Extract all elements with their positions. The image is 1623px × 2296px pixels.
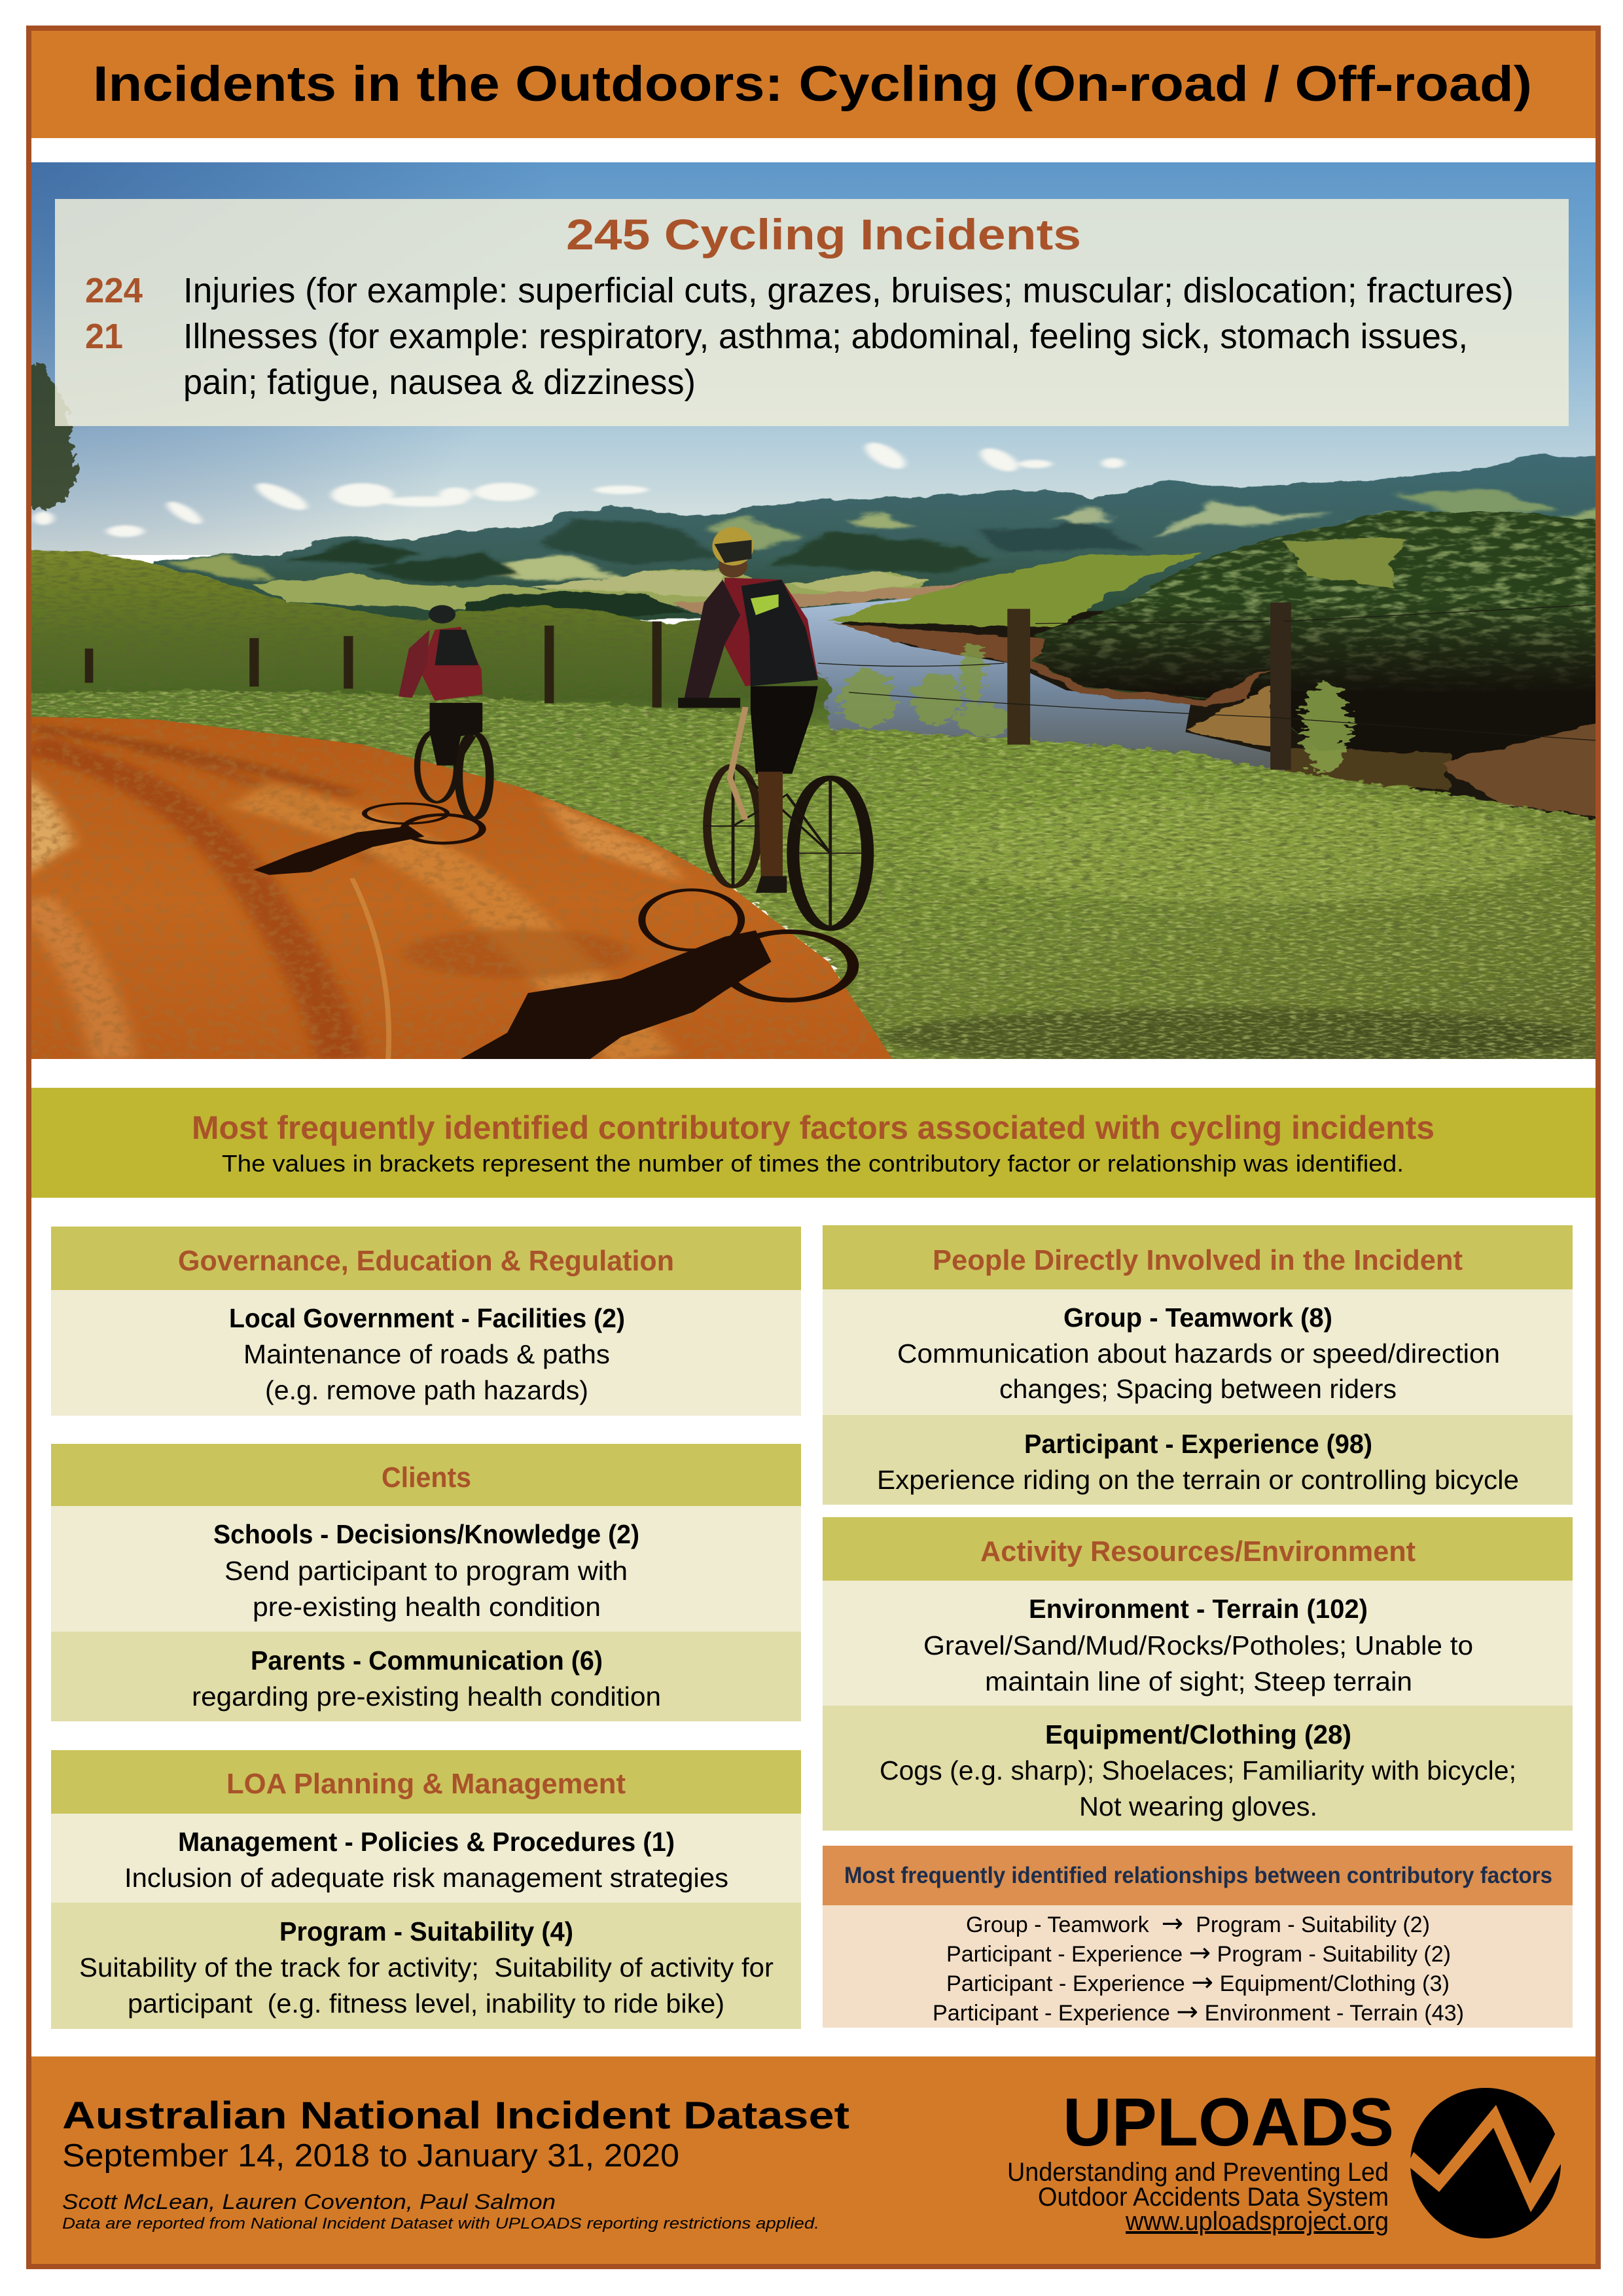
- authors: Scott McLean, Lauren Coventon, Paul Salmon: [62, 2190, 556, 2214]
- factor: local government: [229, 1303, 625, 1405]
- date range: September 14, 2018 to January 31, 2020: [62, 2138, 679, 2174]
- factor: program: participant (e.g. fitness level, inability to ride bike): [128, 1988, 724, 2018]
- heading: Most frequently identified relationships between contributory factors: [844, 1863, 1552, 1888]
- factor: participant: Participant - Experience (98): [1024, 1429, 1372, 1459]
- panel: governance, education and regulation: [51, 1227, 801, 1416]
- stat: illnesses: 21: [85, 317, 123, 356]
- UPLOADS description: www.uploadsproject.org: [1125, 2207, 1389, 2236]
- green hill above river: [829, 552, 1201, 628]
- distant mountains: [155, 454, 1623, 619]
- stat: illnesses: [85, 317, 1468, 402]
- title: Incidents in the Outdoors: Cycling (On-road / Off-road): [93, 56, 1532, 112]
- heading: Governance, Education & Regulation: [178, 1245, 674, 1277]
- factor: group: Communication about hazards or speed/direction: [897, 1338, 1500, 1369]
- title banner: [31, 31, 1596, 138]
- UPLOADS description: Understanding and Preventing Led: [1007, 2158, 1389, 2187]
- factor: schools: Send participant to program with: [224, 1556, 628, 1586]
- panel: activity resources and environment: [823, 1517, 1573, 1831]
- banner note: The values in brackets represent the number of times the contributory factor or relationship was identified.: [222, 1150, 1404, 1177]
- factor: group: [897, 1302, 1500, 1404]
- foreground grass verge: [0, 686, 1623, 1087]
- dark underlay behind the river and forest: [840, 611, 1596, 821]
- factor: equipment: Cogs (e.g. sharp); Shoelaces; Familiarity with bicycle;: [880, 1755, 1516, 1785]
- factor: group: changes; Spacing between riders: [999, 1374, 1397, 1404]
- factor: management: Inclusion of adequate risk management strategies: [124, 1863, 728, 1893]
- shrubs along the fence: [841, 645, 1348, 774]
- relationship list: Participant - Experience → Program - Suitability (2): [946, 1938, 1451, 1968]
- panel: clients: [51, 1444, 801, 1721]
- panel: people directly involved: [823, 1225, 1573, 1505]
- factor: management: [124, 1827, 728, 1893]
- factor: program: Suitability of the track for activity; Suitability of activity for: [79, 1952, 774, 1982]
- section banner: contributory factors: [31, 1088, 1596, 1198]
- stat: illnesses: pain; fatigue, nausea & dizziness): [183, 363, 696, 402]
- stat: injuries: 224: [85, 271, 143, 310]
- UPLOADS description: Outdoor Accidents Data System: [1038, 2183, 1389, 2212]
- banner heading: Most frequently identified contributory factors associated with cycling incidents: [192, 1109, 1435, 1146]
- heading: LOA Planning & Management: [226, 1768, 626, 1800]
- factor: equipment: [880, 1719, 1516, 1821]
- factor: local government: Local Government - Facilities (2): [229, 1303, 625, 1333]
- relationship list: Participant - Experience → Environment - Terrain (43): [933, 1997, 1464, 2027]
- factor: participant: [877, 1429, 1519, 1495]
- factor: parents: regarding pre-existing health condition: [192, 1681, 661, 1712]
- panel: LOA planning and management: [51, 1750, 801, 2029]
- fence posts and wires: [85, 603, 1596, 770]
- photo: two cyclists on a dirt road above a lake: [0, 162, 1623, 1087]
- cast shadows of the cyclists: [254, 804, 853, 1059]
- tree at left edge: [31, 362, 80, 511]
- relationship list: Group - Teamwork → Program - Suitability (2): [966, 1909, 1430, 1939]
- left hillside: [0, 544, 838, 736]
- relationship list: [933, 1909, 1464, 2027]
- factor: schools: pre-existing health condition: [253, 1592, 601, 1622]
- river: [687, 598, 1285, 771]
- panel: relationships between contributory factors: [823, 1846, 1573, 2028]
- factor: group: Group - Teamwork (8): [1063, 1302, 1332, 1333]
- stat: illnesses: Illnesses (for example: respiratory, asthma; abdominal, feeling sick, stomach issues,: [183, 317, 1468, 356]
- far cyclist: [399, 605, 490, 819]
- UPLOADS description: [1007, 2158, 1389, 2236]
- clouds: [33, 440, 1124, 537]
- factor: schools: [213, 1519, 639, 1622]
- factor: environment: Environment - Terrain (102): [1029, 1594, 1368, 1624]
- factor: schools: Schools - Decisions/Knowledge (2): [213, 1519, 639, 1549]
- heading: Clients: [382, 1462, 471, 1494]
- sky: [31, 162, 1596, 555]
- factor: parents: [192, 1645, 661, 1712]
- factor: management: Management - Policies & Procedures (1): [178, 1827, 675, 1857]
- dirt road: [0, 711, 932, 1087]
- factor: environment: maintain line of sight; Steep terrain: [985, 1666, 1412, 1696]
- panel: incident totals: [55, 199, 1569, 426]
- stat: injuries: Injuries (for example: superficial cuts, grazes, bruises; muscular; dislocation; fractures): [183, 271, 1514, 310]
- river banks: [834, 622, 1623, 826]
- factor: program: [79, 1916, 774, 2018]
- factor: local government: (e.g. remove path hazards): [265, 1375, 588, 1405]
- factor: local government: Maintenance of roads & paths: [243, 1339, 610, 1369]
- heading: Activity Resources/Environment: [980, 1535, 1416, 1568]
- factor: environment: Gravel/Sand/Mud/Rocks/Potholes; Unable to: [923, 1630, 1473, 1660]
- near cyclist: [678, 527, 868, 928]
- factor: participant: Experience riding on the terrain or controlling bicycle: [877, 1465, 1519, 1495]
- mid-ground light hills: [249, 568, 973, 619]
- factor: environment: [923, 1594, 1473, 1696]
- icon: UPLOADS logo: [1407, 2088, 1565, 2238]
- factor: parents: Parents - Communication (6): [251, 1645, 603, 1676]
- verge base colour below the grass edge: [0, 703, 724, 882]
- dark forest on right: [1031, 511, 1596, 735]
- heading: 245 cycling incidents: 245 Cycling Incidents: [566, 210, 1081, 259]
- factor: equipment: Not wearing gloves.: [1079, 1791, 1317, 1821]
- factor: equipment: Equipment/Clothing (28): [1045, 1719, 1351, 1749]
- heading: People Directly Involved in the Incident: [933, 1244, 1463, 1276]
- dataset title: Australian National Incident Dataset: [62, 2094, 849, 2137]
- UPLOADS wordmark: UPLOADS: [1063, 2085, 1394, 2161]
- footer band: [31, 2056, 1596, 2265]
- factor: program: Program - Suitability (4): [279, 1916, 573, 1946]
- relationship list: Participant - Experience → Equipment/Clothing (3): [946, 1967, 1450, 1998]
- data note: Data are reported from National Incident Dataset with UPLOADS reporting restrictions applied.: [62, 2215, 819, 2233]
